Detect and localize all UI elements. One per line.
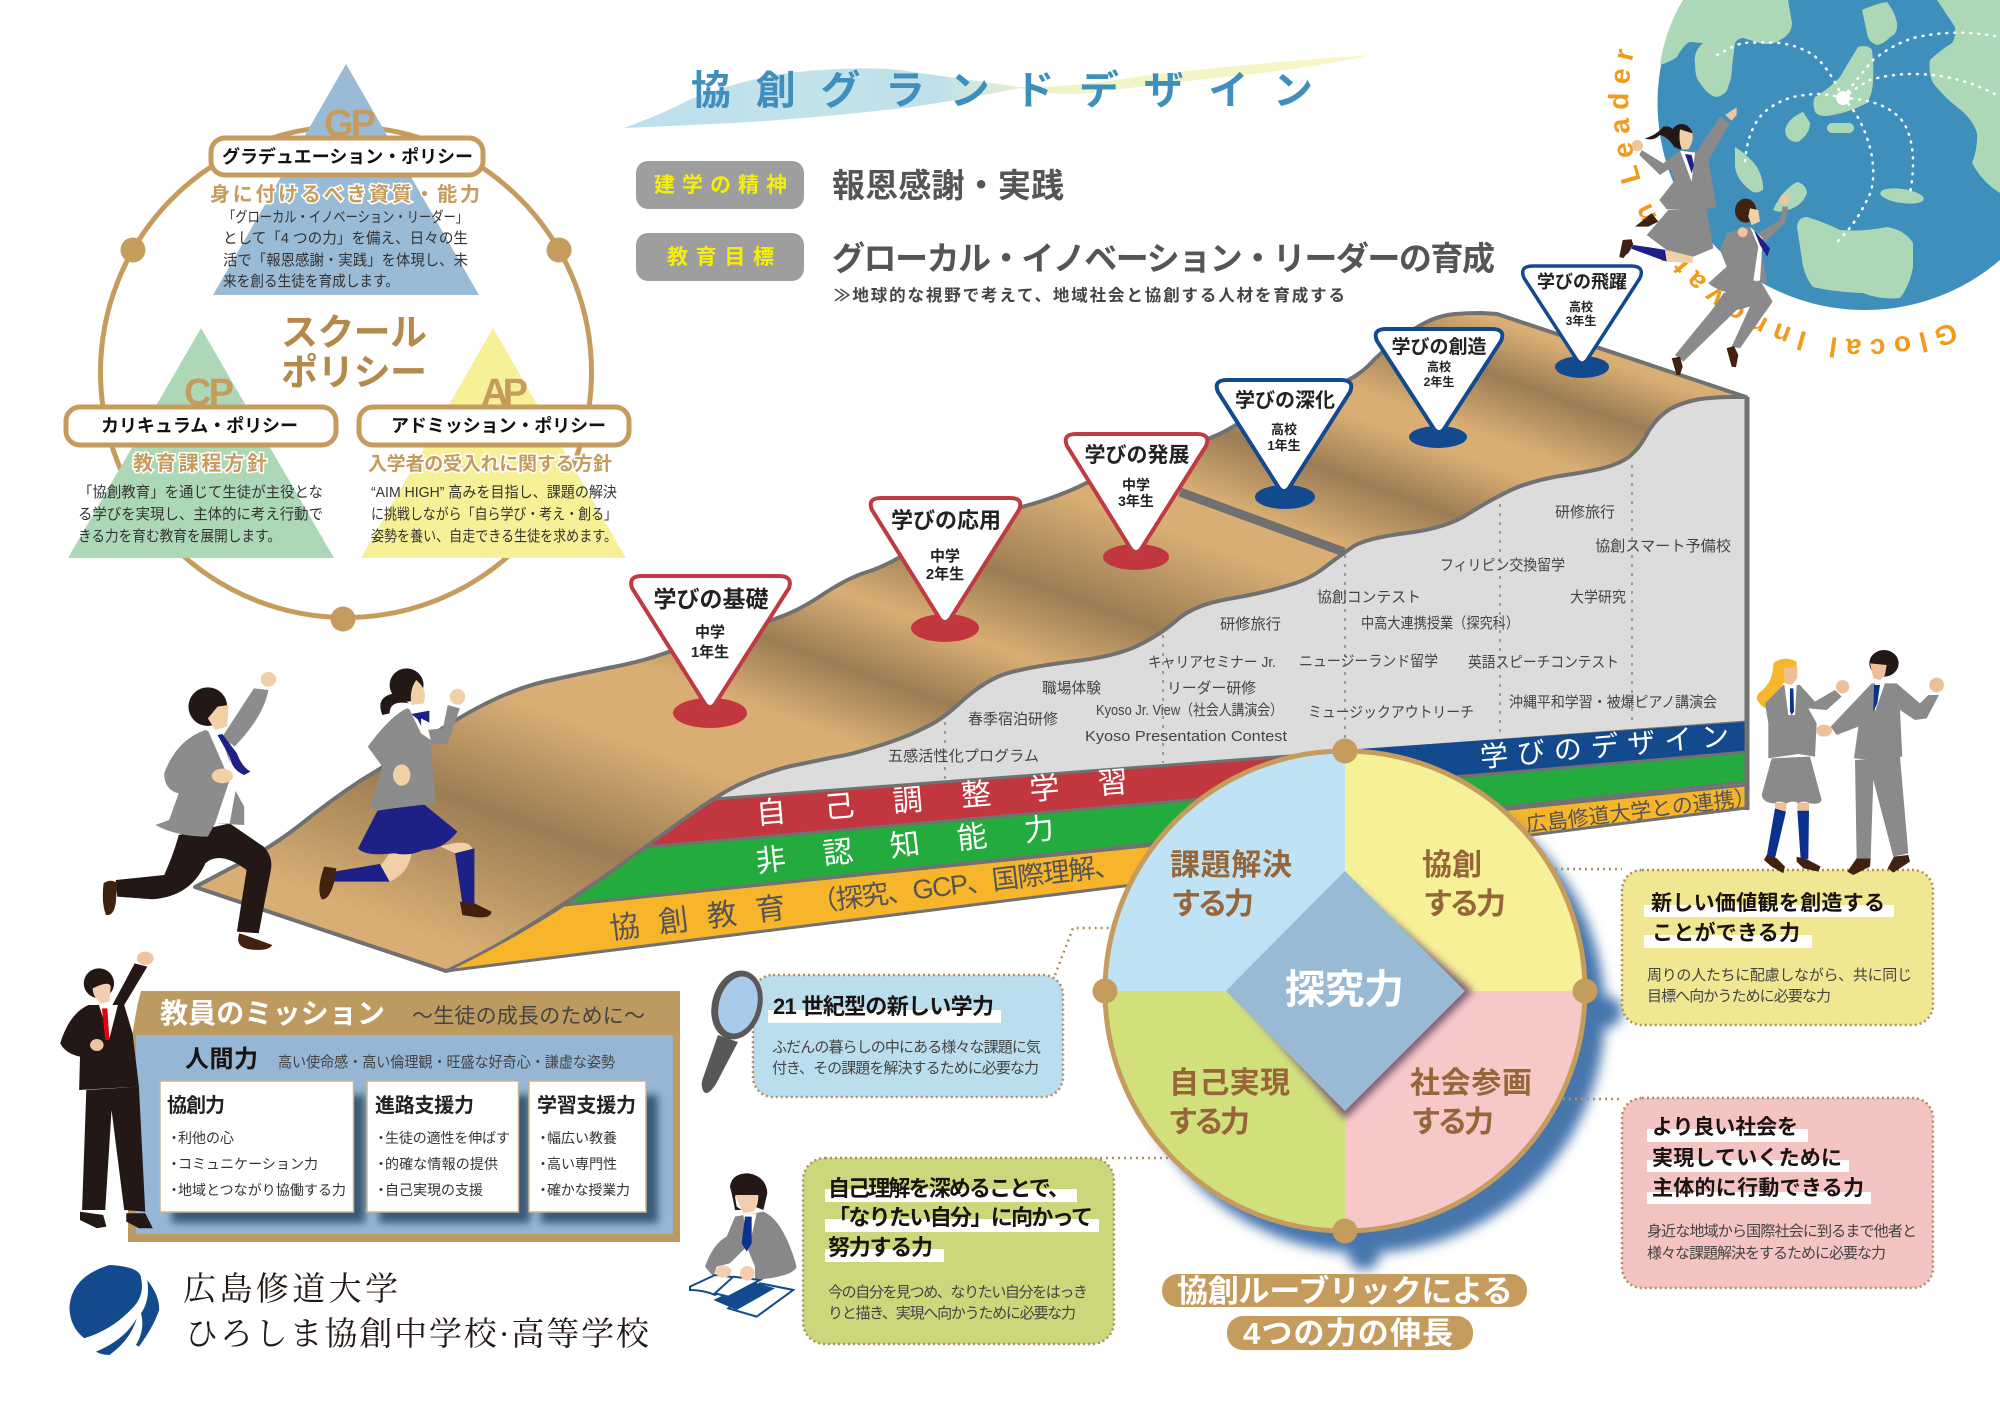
callout: better society: 様々な課題解決をするために必要な力 <box>1647 1245 1886 1262</box>
card: collaboration: コミュニケーション力 <box>178 1156 318 1172</box>
band: self-regulated learning <box>646 720 1746 847</box>
card: career support: 的確な情報の提供 <box>385 1156 498 1172</box>
card: learning support: ・ <box>536 1156 550 1172</box>
triangle: AP: アドミッション・ポリシー <box>391 415 606 436</box>
heading: school policy <box>281 312 427 393</box>
right edge stroke <box>1744 397 1750 810</box>
band: self-regulated learning: 自己調整学習 <box>755 762 1168 831</box>
sign: high school 1: 1年生 <box>1267 438 1301 453</box>
triangle: GP <box>210 64 483 295</box>
figure: running girl <box>319 668 491 917</box>
card: learning support: 学習支援力 <box>537 1094 636 1117</box>
triangle: CP <box>66 328 336 558</box>
quadrant: social participation: 社会参画 <box>1410 1067 1532 1100</box>
card: learning support: ・ <box>536 1182 550 1198</box>
callout: new values: 周りの人たちに配慮しながら、共に同じ <box>1647 967 1912 984</box>
school policy diagram <box>66 64 629 632</box>
triangle: GP: 「グローカル・イノベーション・リーダー」 <box>223 209 468 226</box>
band: kyoso education <box>446 785 1757 971</box>
card: career support <box>367 1081 518 1212</box>
sign: high school 2: 2年生 <box>1424 374 1454 389</box>
card: learning support: ・ <box>536 1130 550 1146</box>
tan path surface <box>195 313 1746 971</box>
triangle: CP: カリキュラム・ポリシー <box>101 415 298 436</box>
globe <box>1658 0 2000 310</box>
triangle: AP: “AIM HIGH” 高みを目指し、課題の解決 <box>371 484 617 501</box>
wheel: four powers <box>1092 738 1622 1270</box>
gray wall with activities <box>714 397 1746 799</box>
human skills: 人間力 <box>185 1046 258 1073</box>
triangle: GP: 活で「報恩感謝・実践」を体現し、未 <box>223 252 468 269</box>
callout: self-realization: りと描き、実現へ向かうために必要な力 <box>828 1305 1076 1322</box>
heading: school policy: スクール <box>281 312 427 353</box>
triangle: AP: AP <box>481 372 528 414</box>
band: non-cognitive skills <box>564 752 1746 905</box>
callout: self-realization: 今の自分を見つめ、なりたい自分をはっき <box>828 1284 1088 1301</box>
gray wall with activities: Kyoso Presentation Contest <box>1085 728 1288 745</box>
sign: high school 1: 学びの深化 <box>1235 389 1335 412</box>
callout: 21st-century skills: 付き、その課題を解決するために必要な力 <box>772 1060 1039 1077</box>
quadrant: social participation: する力 <box>1411 1106 1494 1139</box>
caption: rubric: 4つの力の伸長 <box>1243 1316 1453 1351</box>
triangle: CP: 「協創教育」を通じて生徒が主役とな <box>78 484 323 501</box>
callout: self-realization: 「なりたい自分」に向かって <box>828 1205 1093 1230</box>
gray wall with activities: ニュージーランド留学 <box>1299 653 1438 670</box>
human skills <box>185 1046 615 1073</box>
quadrant: problem solving: する力 <box>1171 888 1254 921</box>
sign: junior high 3: 中学 <box>1122 477 1150 493</box>
gray wall with activities: フィリピン交換留学 <box>1440 557 1565 574</box>
triangle: GP: 身に付けるべき資質・能力 <box>210 183 480 206</box>
badge: founding spirit <box>636 161 804 209</box>
callout: 21st-century skills: 21 世紀型の新しい学力 <box>773 994 994 1019</box>
gray wall with activities: 研修旅行 <box>1555 504 1615 521</box>
card: collaboration <box>160 1081 354 1212</box>
caption: rubric <box>1162 1274 1527 1351</box>
card: learning support <box>529 1081 646 1212</box>
learning mountain <box>195 313 1757 971</box>
sign: high school 2 <box>1376 329 1502 448</box>
sign: junior high 1: 学びの基礎 <box>654 586 768 612</box>
connector lines <box>1055 869 1622 1158</box>
triangle: GP: 来を創る生徒を育成します。 <box>223 273 399 290</box>
callout: better society: 主体的に行動できる力 <box>1652 1177 1864 1200</box>
gray wall with activities: ミュージックアウトリーチ <box>1308 704 1474 721</box>
figure: student studying <box>690 1173 797 1317</box>
gray wall with activities: 英語スピーチコンテスト <box>1468 653 1619 671</box>
sign: high school 3: 学びの飛躍 <box>1537 271 1627 292</box>
educational goal text: グローカル・イノベーション・リーダーの育成 <box>832 240 1495 277</box>
mission heading: 教員のミッション <box>160 998 385 1029</box>
sign: high school 2: 高校 <box>1427 359 1451 374</box>
card: collaboration: 地域とつながり協働する力 <box>178 1182 346 1198</box>
badge: founding spirit: 建学の精神 <box>654 174 787 197</box>
quadrant: problem solving <box>1105 751 1345 991</box>
quadrant: social participation <box>1345 991 1585 1231</box>
mission subheading: ～生徒の成長のために～ <box>412 1005 645 1028</box>
callout: new values <box>1622 870 1933 1025</box>
triangle: AP: に挑戦しながら「自ら学び・考え・創る」 <box>371 506 617 523</box>
triangle: GP: グラデュエーション・ポリシー <box>222 146 473 167</box>
quadrant: self-realization <box>1105 991 1345 1231</box>
gray wall with activities: 春季宿泊研修 <box>968 711 1058 728</box>
logo: Hiroshima Shudo: 広島修道大学 <box>183 1271 398 1308</box>
figure: jumping girl <box>1619 107 1737 263</box>
diamond: inquiry power <box>1226 871 1465 1111</box>
sign: junior high 2 <box>871 498 1020 642</box>
gray wall with activities: リーダー研修 <box>1167 680 1256 697</box>
panel: teacher mission <box>128 991 680 1242</box>
title with swoosh <box>624 55 1374 128</box>
figure: handshake pair <box>1757 650 1944 875</box>
sign: high school 2: 学びの創造 <box>1391 335 1487 358</box>
diamond: inquiry power: 探究力 <box>1285 968 1404 1012</box>
title with swoosh: 協創グランドデザイン <box>691 68 1313 113</box>
callout: 21st-century skills: ふだんの暮らしの中にある様々な課題に気 <box>772 1039 1041 1056</box>
triangle: CP: きる力を育む教育を展開します。 <box>78 528 281 545</box>
sign: junior high 2: 学びの応用 <box>891 508 1001 533</box>
triangle: AP <box>359 328 629 558</box>
sign: junior high 2: 中学 <box>930 547 960 565</box>
founding spirit text: 報恩感謝・実践 <box>832 167 1064 204</box>
gray wall with activities: 五感活性化プログラム <box>888 748 1039 765</box>
callout: self-realization <box>803 1158 1114 1344</box>
card: collaboration: ・ <box>167 1182 181 1198</box>
sign: high school 3 <box>1523 266 1641 378</box>
card: collaboration: 利他の心 <box>178 1130 234 1146</box>
card: collaboration: ・ <box>167 1130 181 1146</box>
gray wall with activities: キャリアセミナー Jr. <box>1148 654 1276 671</box>
triangle: AP: 入学者の受入れに関する方針 <box>368 452 612 475</box>
triangle: CP: る学びを実現し、主体的に考え行動で <box>78 506 323 523</box>
card: career support: ・ <box>374 1182 388 1198</box>
heading: school policy: ポリシー <box>281 352 427 393</box>
callout: new values: ことができる力 <box>1652 921 1800 945</box>
quadrant: collaboration: する力 <box>1423 888 1506 921</box>
gray bar on path <box>1180 492 1344 552</box>
sign: junior high 3: 学びの発展 <box>1084 444 1190 467</box>
callout: self-realization: 自己理解を深めることで、 <box>828 1176 1070 1201</box>
gray wall with activities: Kyoso Jr. View（社会人講演会） <box>1096 702 1283 719</box>
callout: 21st-century skills <box>753 975 1063 1097</box>
sign: high school 3: 3年生 <box>1566 313 1596 328</box>
triangle: CP: 教育課程方針 <box>133 452 267 475</box>
badge: educational goal <box>636 233 804 281</box>
human skills: 高い使命感・高い倫理観・旺盛な好奇心・謙虚な姿勢 <box>278 1054 615 1071</box>
gray wall with activities: 職場体験 <box>1042 680 1101 697</box>
sign: junior high 1: 1年生 <box>691 643 729 661</box>
sign: junior high 2: 2年生 <box>926 565 964 583</box>
sign: junior high 3 <box>1066 434 1207 570</box>
band: kyoso education: 広島修道大学との連携） <box>1525 786 1757 837</box>
quadrant: collaboration <box>1345 751 1585 991</box>
card: career support: 自己実現の支援 <box>385 1182 483 1198</box>
gray wall with activities: 研修旅行 <box>1220 616 1281 633</box>
caption: rubric: 協創ルーブリックによる <box>1177 1274 1513 1309</box>
gray wall with activities: 協創スマート予備校 <box>1595 538 1731 555</box>
goal note: ≫地球的な視野で考えて、地域社会と協創する人材を育成する <box>834 285 1345 305</box>
girl student <box>1757 659 1849 873</box>
card: learning support: 確かな授業力 <box>547 1182 630 1198</box>
sign: junior high 3: 3年生 <box>1118 493 1154 509</box>
card: learning support: 幅広い教養 <box>547 1130 617 1146</box>
gray wall with activities: 協創コンテスト <box>1317 589 1421 606</box>
card: career support: 進路支援力 <box>375 1094 474 1117</box>
sign: high school 1: 高校 <box>1271 422 1297 437</box>
quadrant: collaboration: 協創 <box>1422 849 1482 882</box>
callout: new values: 新しい価値観を創造する <box>1651 892 1885 915</box>
logo: Hiroshima Shudo <box>69 1265 650 1355</box>
wheel shadow <box>1125 773 1622 1270</box>
card: career support: ・ <box>374 1156 388 1172</box>
figure: teacher <box>60 952 154 1228</box>
sign: junior high 1 <box>631 576 790 728</box>
sign: high school 1 <box>1217 380 1351 509</box>
gray wall with activities: 大学研究 <box>1570 589 1626 606</box>
boy student <box>1831 650 1944 875</box>
card: collaboration: ・ <box>167 1156 181 1172</box>
gray wall with activities: 沖縄平和学習・被爆ピアノ講演会 <box>1509 694 1717 711</box>
triangle: AP: 姿勢を養い、自走できる生徒を求めます。 <box>371 528 617 545</box>
icon: magnifying glass <box>702 965 770 1093</box>
figure: running boy <box>103 672 276 950</box>
callout: better society: 実現していくために <box>1652 1147 1842 1170</box>
quadrant: self-realization: 自己実現 <box>1169 1067 1290 1100</box>
callout: self-realization: 努力する力 <box>828 1235 933 1260</box>
triangle: GP: GP <box>324 103 376 145</box>
callout: better society <box>1622 1098 1933 1288</box>
sign: high school 3: 高校 <box>1569 299 1593 314</box>
triangle: GP: として「4 つの力」を備え、日々の生 <box>223 230 468 247</box>
card: collaboration: 協創力 <box>167 1094 225 1117</box>
quadrant: problem solving: 課題解決 <box>1170 849 1292 882</box>
dotted routes <box>1717 33 2000 242</box>
figure: jumping boy <box>1672 194 1790 375</box>
ring with dots <box>100 126 592 632</box>
curved text: Glocal Innovation Leader: Glocal Innovation Leader <box>1608 48 1956 358</box>
card: learning support: 高い専門性 <box>547 1156 617 1172</box>
band: non-cognitive skills: 非認知能力 <box>754 808 1093 879</box>
band: kyoso education: 協創教育 <box>608 889 806 946</box>
band: self-regulated learning: 学びのデザイン <box>1479 720 1740 773</box>
callout: better society: 身近な地域から国際社会に到るまで他者と <box>1647 1223 1917 1240</box>
card: career support: ・ <box>374 1130 388 1146</box>
badge: educational goal: 教育目標 <box>667 246 774 269</box>
card: career support: 生徒の適性を伸ばす <box>385 1130 510 1146</box>
gray wall with activities: 中高大連携授業（探究科） <box>1361 615 1519 632</box>
triangle: CP: CP <box>184 372 234 414</box>
callout: better society: より良い社会を <box>1652 1116 1798 1139</box>
callout: new values: 目標へ向かうために必要な力 <box>1647 988 1831 1005</box>
quadrant: self-realization: する力 <box>1168 1106 1250 1139</box>
sign: junior high 1: 中学 <box>695 623 725 641</box>
band: kyoso education: （探究、GCP、国際理解、 <box>809 850 1122 918</box>
card shadows <box>172 1095 658 1223</box>
logo: Hiroshima Shudo: ひろしま協創中学校·高等学校 <box>185 1316 650 1353</box>
